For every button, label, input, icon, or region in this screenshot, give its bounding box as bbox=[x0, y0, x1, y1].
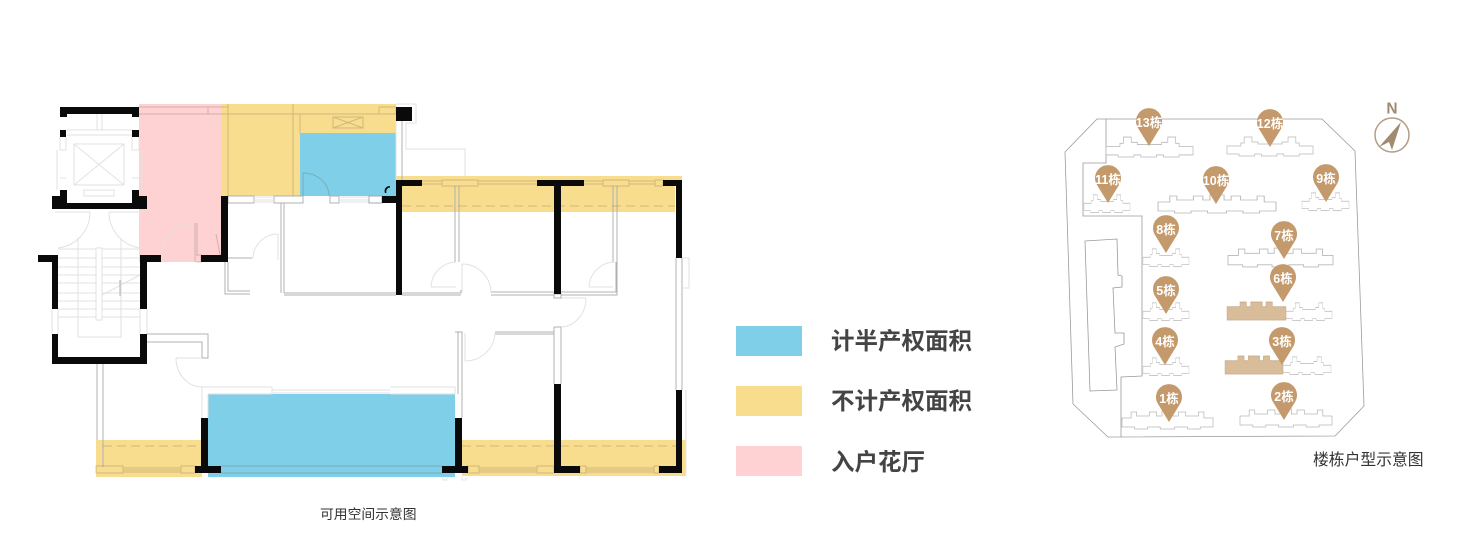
marker: building 5: 5栋 bbox=[1156, 283, 1176, 298]
marker: building 9: 9栋 bbox=[1316, 171, 1336, 186]
zone: lower right balcony (yellow) bbox=[462, 440, 686, 476]
site plan bbox=[1065, 108, 1364, 437]
marker: building 10 bbox=[1203, 166, 1230, 204]
highlighted unit in building 3 bbox=[1225, 356, 1283, 374]
marker: building 6 bbox=[1270, 264, 1296, 302]
marker: building 1 bbox=[1156, 384, 1182, 422]
zone: half-counted top (blue) bbox=[300, 133, 396, 196]
marker: building 11 bbox=[1095, 165, 1121, 203]
existing long building bbox=[1085, 239, 1124, 391]
compass dial bbox=[1375, 118, 1409, 152]
marker: building 6: 6栋 bbox=[1273, 271, 1293, 286]
highlighted unit in building 6 bbox=[1227, 302, 1286, 320]
caption: floor plan: 可用空间示意图 bbox=[320, 506, 417, 522]
marker: building 13 bbox=[1136, 108, 1163, 146]
thin wall and fixture lines bbox=[52, 104, 689, 480]
zone: lower left balcony (yellow) bbox=[96, 440, 202, 477]
marker: building 7 bbox=[1271, 221, 1297, 259]
marker: building 10: 10栋 bbox=[1203, 173, 1230, 188]
compass bbox=[1375, 100, 1409, 152]
legend label: half-counted area: 计半产权面积 bbox=[831, 328, 972, 354]
marker: building 4 bbox=[1152, 327, 1178, 365]
marker: building 11: 11栋 bbox=[1095, 172, 1121, 187]
legend swatch: half-counted area bbox=[736, 326, 802, 356]
caption: building plan: 楼栋户型示意图 bbox=[1313, 450, 1424, 469]
marker: building 13: 13栋 bbox=[1136, 115, 1163, 130]
marker: building 12 bbox=[1257, 109, 1284, 147]
marker: building 2: 2栋 bbox=[1274, 389, 1294, 404]
compass needle bbox=[1379, 122, 1401, 150]
site inner road bbox=[1083, 119, 1142, 437]
marker: building 7: 7栋 bbox=[1274, 228, 1294, 243]
marker: building 8 bbox=[1153, 215, 1179, 253]
marker: building 3: 3栋 bbox=[1272, 334, 1292, 349]
marker: building 1: 1栋 bbox=[1159, 391, 1179, 406]
zone: entry hall (pink) bbox=[139, 104, 228, 262]
marker: building 5 bbox=[1153, 276, 1179, 314]
marker: building 2 bbox=[1271, 382, 1297, 420]
marker: building 4: 4栋 bbox=[1155, 334, 1175, 349]
zone: half-counted bottom (blue) bbox=[208, 394, 455, 477]
marker: building 9 bbox=[1313, 164, 1339, 202]
zone: upper balcony band (yellow) bbox=[396, 176, 682, 212]
marker: building 3 bbox=[1269, 327, 1295, 365]
compass north label: N bbox=[1386, 100, 1398, 118]
legend swatch: non-counted area bbox=[736, 386, 802, 416]
site boundary bbox=[1065, 119, 1364, 437]
floor plan bbox=[38, 104, 689, 480]
zone: non-counted area top (yellow) bbox=[221, 104, 396, 196]
building blocks bbox=[1084, 137, 1349, 429]
black structural walls bbox=[38, 107, 682, 473]
legend label: entry hall: 入户花厅 bbox=[831, 449, 925, 475]
legend swatch: entry hall bbox=[736, 446, 802, 476]
marker: building 8: 8栋 bbox=[1156, 222, 1176, 237]
legend bbox=[736, 326, 972, 476]
marker: building 12: 12栋 bbox=[1257, 116, 1284, 131]
legend label: non-counted area: 不计产权面积 bbox=[831, 388, 972, 414]
